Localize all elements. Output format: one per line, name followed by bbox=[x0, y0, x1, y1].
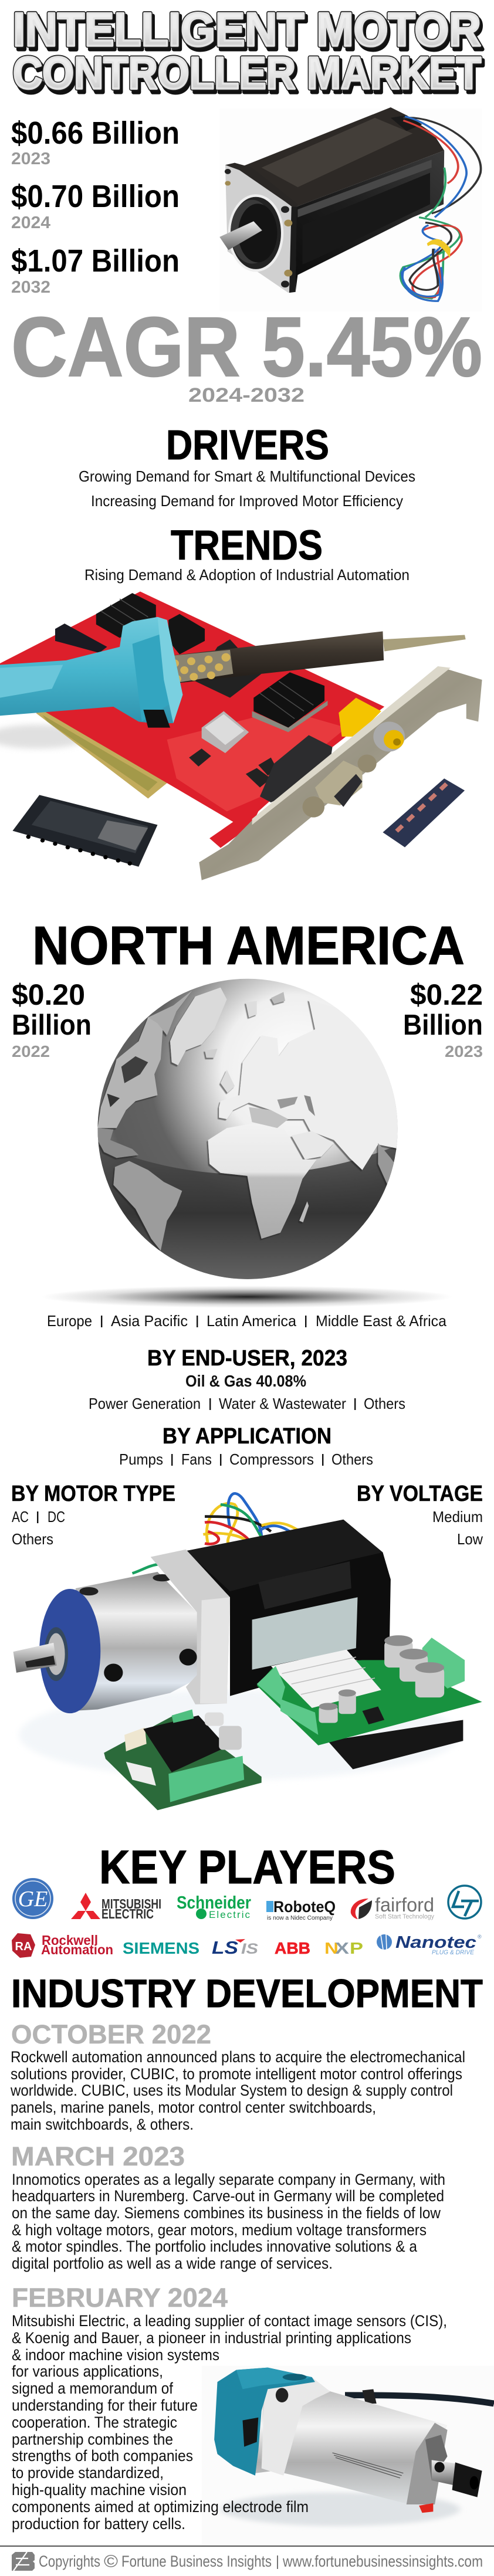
paragraph: february 2024 bbox=[12, 2312, 447, 2533]
logo: LS bbox=[212, 1937, 258, 1958]
north america 2023 value: $0.22 bbox=[410, 978, 483, 1011]
end-user list: Water & Wastewater bbox=[219, 1395, 346, 1412]
voltage list: Medium bbox=[432, 1508, 483, 1526]
logo: Siemens: SIEMENS bbox=[123, 1939, 199, 1957]
logo: NXP: N bbox=[324, 1939, 339, 1957]
logo: NXP: X bbox=[335, 1939, 349, 1957]
paragraph: february 2024: signed a memorandum of bbox=[12, 2380, 174, 2397]
paragraph: february 2024: components aimed at optimizing electrode film bbox=[12, 2498, 309, 2516]
regions list bbox=[47, 1312, 447, 1330]
logo: Fairford bbox=[351, 1894, 434, 1920]
north america 2023 value: Billion bbox=[403, 1009, 483, 1041]
north america 2022 value: $0.20 bbox=[12, 978, 85, 1011]
leading end-user share: Oil & Gas 40.08% bbox=[185, 1372, 306, 1390]
paragraph: march 2023: digital portfolio as well as a wide range of services. bbox=[12, 2255, 333, 2272]
paragraph: february 2024: cooperation. The strategic bbox=[12, 2414, 177, 2431]
regions list: Latin America bbox=[207, 1312, 297, 1330]
heading: key players: KEY PLAYERS bbox=[99, 1841, 395, 1894]
paragraph: october 2022: worldwide. CUBIC, uses its Modular System to design & supply control bbox=[10, 2082, 453, 2099]
application list: Others bbox=[331, 1450, 373, 1468]
driver 2: Increasing Demand for Improved Motor Efficiency bbox=[91, 492, 403, 510]
trend 1: Rising Demand & Adoption of Industrial Automation bbox=[84, 566, 410, 584]
end-user list bbox=[89, 1395, 405, 1412]
value 2023: $0.66 Billion bbox=[11, 116, 180, 151]
logo: Mitsubishi Electric bbox=[71, 1893, 161, 1921]
image: globe bbox=[94, 979, 403, 1283]
copyright line bbox=[39, 2552, 483, 2571]
heading: trends: TRENDS bbox=[171, 523, 323, 569]
paragraph: february 2024: high-quality machine vision bbox=[12, 2481, 187, 2499]
heading: drivers: DRIVERS bbox=[166, 422, 329, 469]
application list: Pumps bbox=[119, 1450, 163, 1468]
logos bbox=[12, 1878, 482, 1958]
motor type list: AC bbox=[12, 1508, 29, 1526]
title bbox=[13, 4, 483, 102]
regions list: Asia Pacific bbox=[111, 1312, 188, 1330]
regions list: Europe bbox=[47, 1312, 92, 1330]
paragraph: march 2023: & motor spindles. The portfolio includes innovative solutions & a bbox=[12, 2238, 417, 2255]
paragraph: march 2023: headquarters in Nuremberg. Carve-out in Germany will be completed bbox=[12, 2187, 444, 2205]
cagr period: 2024-2032 bbox=[188, 384, 304, 406]
icon: Fortune Business Insights logo bbox=[12, 2552, 35, 2571]
motor type list: Others bbox=[12, 1530, 53, 1548]
logo: Rockwell Automation: Automation bbox=[41, 1942, 113, 1957]
paragraph: october 2022: Rockwell automation announced plans to acquire the electromechanical bbox=[11, 2048, 465, 2066]
logo: Rockwell Automation bbox=[12, 1933, 113, 1958]
image: geared motor and driver boards bbox=[13, 1493, 482, 1810]
heading: by motor type: BY MOTOR TYPE bbox=[11, 1482, 175, 1506]
north america 2023 value bbox=[403, 978, 483, 1060]
logo: ABB: ABB bbox=[275, 1939, 310, 1957]
paragraph: february 2024: understanding for their future bbox=[12, 2397, 198, 2414]
logo: Nanotec: PLUG & DRIVE bbox=[432, 1949, 475, 1956]
logo: Rockwell Automation: Rockwell bbox=[42, 1933, 98, 1948]
value 2024: $0.70 Billion bbox=[11, 179, 180, 214]
copyright line: Fortune Business Insights bbox=[121, 2553, 272, 2570]
logo: Rockwell Automation: RA bbox=[15, 1940, 32, 1953]
logo: NXP: P bbox=[350, 1939, 363, 1957]
paragraph: february 2024: production for battery cells. bbox=[12, 2515, 185, 2533]
logo: Schneider Electric: Schneider bbox=[177, 1892, 251, 1913]
year 2032: 2032 bbox=[11, 278, 50, 297]
logo: Fairford: Soft Start Technology bbox=[375, 1913, 434, 1920]
logo: LS: LS bbox=[212, 1937, 238, 1958]
logo: RoboteQ: is now a Nidec Company bbox=[267, 1915, 333, 1921]
paragraph: october 2022: main switchboards, & others. bbox=[11, 2116, 194, 2133]
logo: L&T bbox=[448, 1886, 481, 1919]
logo: RoboteQ: RoboteQ bbox=[273, 1898, 336, 1916]
copyright line: © bbox=[104, 2552, 118, 2571]
logo: NXP bbox=[324, 1939, 363, 1957]
value 2032: $1.07 Billion bbox=[11, 243, 180, 279]
date: march 2023: MARCH 2023 bbox=[11, 2141, 185, 2171]
logo: Mitsubishi Electric: ELECTRIC bbox=[101, 1906, 154, 1921]
paragraph: march 2023 bbox=[12, 2171, 445, 2272]
paragraph: february 2024: to provide standardized, bbox=[12, 2464, 164, 2482]
north america 2022 value bbox=[12, 978, 92, 1060]
heading: by voltage: BY VOLTAGE bbox=[357, 1482, 483, 1506]
year 2024: 2024 bbox=[11, 213, 50, 232]
application list: Compressors bbox=[229, 1450, 314, 1468]
logo: Schneider Electric: Electric bbox=[209, 1909, 250, 1920]
motor type list: DC bbox=[48, 1508, 65, 1526]
voltage list bbox=[432, 1508, 483, 1548]
north america 2023 value: 2023 bbox=[445, 1042, 483, 1060]
copyright line: Copyrights bbox=[39, 2553, 100, 2570]
motor type list bbox=[12, 1508, 65, 1548]
north america 2022 value: Billion bbox=[12, 1009, 92, 1041]
application list: Fans bbox=[181, 1450, 212, 1468]
paragraph: february 2024: for various applications, bbox=[12, 2363, 163, 2380]
heading: north america: NORTH AMERICA bbox=[32, 915, 465, 976]
paragraph: march 2023: & high voltage motors, gear motors, medium voltage transformers bbox=[12, 2221, 427, 2239]
paragraph: march 2023: on the same day. Siemens combines its business in the fields of low bbox=[12, 2204, 441, 2222]
market values bbox=[11, 116, 180, 297]
logo: Schneider Electric bbox=[177, 1892, 251, 1920]
paragraph: february 2024: Mitsubishi Electric, a leading supplier of contact image sensors (CIS), bbox=[12, 2312, 447, 2330]
paragraph: october 2022: solutions provider, CUBIC, to promote intelligent motor control offerings bbox=[11, 2065, 462, 2083]
year 2023: 2023 bbox=[11, 150, 50, 168]
logo: Nanotec bbox=[377, 1933, 482, 1956]
date: october 2022: OCTOBER 2022 bbox=[11, 2019, 211, 2049]
paragraph: october 2022 bbox=[10, 2048, 465, 2133]
logo: Nanotec: Nanotec bbox=[395, 1933, 476, 1952]
logo: Fairford: fairford bbox=[375, 1894, 434, 1916]
paragraph: february 2024: & indoor machine vision systems bbox=[12, 2346, 219, 2364]
regions list: Middle East & Africa bbox=[316, 1312, 447, 1330]
logo: GE bbox=[12, 1878, 53, 1919]
logo: Nanotec: ® bbox=[478, 1934, 482, 1940]
end-user list: Power Generation bbox=[89, 1395, 201, 1412]
image: router motor tool bbox=[202, 2366, 494, 2546]
logo: LS: IS bbox=[241, 1941, 258, 1957]
image: stepper motor bbox=[219, 107, 482, 311]
north america 2022 value: 2022 bbox=[12, 1042, 50, 1060]
paragraph: march 2023: Innomotics operates as a legally separate company in Germany, with bbox=[12, 2171, 445, 2188]
paragraph: february 2024: partnership combines the bbox=[12, 2431, 173, 2448]
footer bbox=[0, 2546, 494, 2571]
logo: Mitsubishi Electric: MITSUBISHI bbox=[101, 1896, 161, 1911]
end-user list: Others bbox=[364, 1395, 405, 1412]
paragraph: february 2024: strengths of both companies bbox=[12, 2447, 193, 2465]
heading: by end-user: BY END-USER, 2023 bbox=[147, 1346, 347, 1371]
logo: GE: GE bbox=[18, 1887, 48, 1911]
driver 1: Growing Demand for Smart & Multifunctional Devices bbox=[79, 467, 415, 485]
heading: by application: BY APPLICATION bbox=[163, 1424, 331, 1449]
logo: RoboteQ bbox=[266, 1898, 336, 1921]
date: february 2024: FEBRUARY 2024 bbox=[12, 2283, 228, 2313]
image: circuit board and soldering iron bbox=[0, 592, 482, 880]
paragraph: february 2024: & Koenig and Bauer, a pioneer in industrial printing applications bbox=[12, 2329, 411, 2347]
application list bbox=[119, 1450, 373, 1468]
globe shadow bbox=[42, 1286, 452, 1308]
voltage list: Low bbox=[457, 1530, 483, 1548]
paragraph: october 2022: panels, marine panels, motor control center switchboards, bbox=[11, 2099, 376, 2116]
